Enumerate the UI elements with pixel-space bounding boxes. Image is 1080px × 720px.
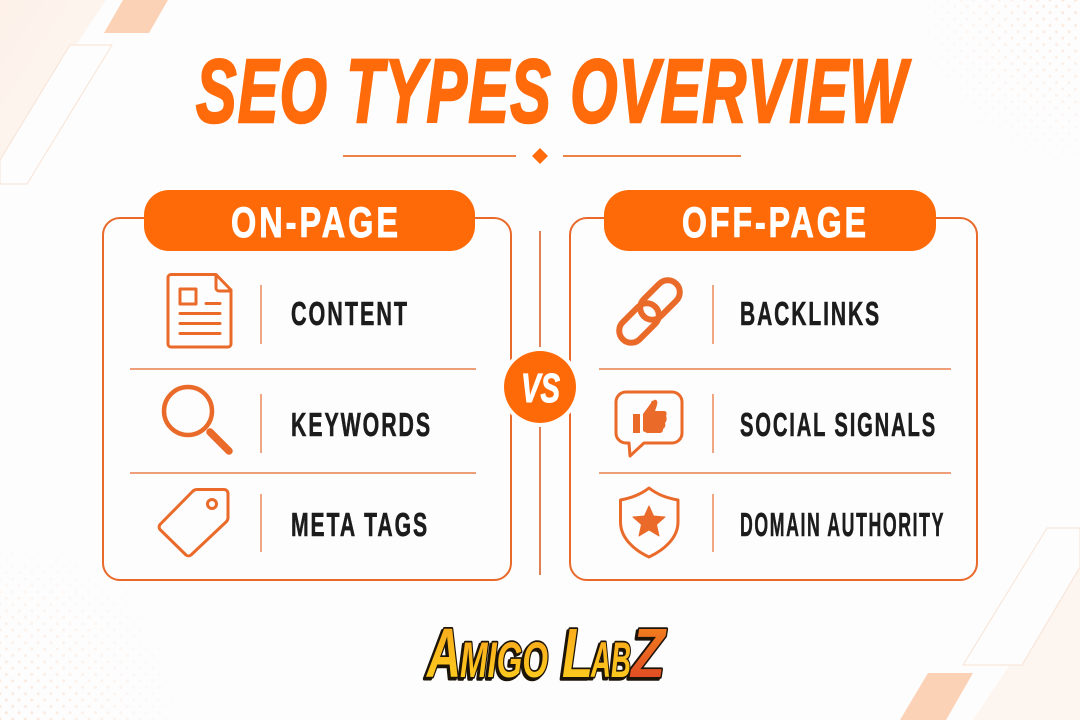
panel outline xyxy=(103,218,511,580)
logo: Amigo LabZ: Z xyxy=(629,614,667,692)
logo: Amigo LabZ: L xyxy=(562,614,593,692)
label: backlinks: BACKLINKS xyxy=(740,295,881,332)
divider stroke: content xyxy=(260,285,262,344)
label: social signals: SOCIAL SIGNALS xyxy=(740,406,937,443)
heading pill: on-page xyxy=(144,190,475,251)
panel outline xyxy=(570,218,977,580)
decoration: top-right halftone dots xyxy=(948,0,1077,128)
icon: document xyxy=(168,274,231,347)
panel: off-page xyxy=(570,190,977,580)
heading pill: on-page: ON-PAGE xyxy=(231,199,401,247)
decoration: bottom-right corner shapes xyxy=(900,528,1080,720)
logo: Amigo LabZ: AB xyxy=(590,632,631,688)
VS badge: VS xyxy=(521,365,560,411)
VS badge xyxy=(500,347,580,427)
logo: Amigo LabZ: MIGO xyxy=(460,632,548,688)
icon: thumbs-up speech bubble xyxy=(616,392,682,456)
icon: shield with star xyxy=(620,488,678,557)
icon: magnifier xyxy=(164,387,229,451)
heading pill: off-page: OFF-PAGE xyxy=(682,199,869,247)
panel: on-page xyxy=(103,190,511,580)
heading pill: off-page xyxy=(604,190,936,251)
logo: Amigo LabZ xyxy=(426,614,667,692)
centre vertical divider xyxy=(539,231,541,575)
decoration: bottom-left halftone dots xyxy=(0,573,146,720)
label: meta tags: META TAGS xyxy=(291,506,429,543)
label: keywords: KEYWORDS xyxy=(291,406,432,443)
logo: Amigo LabZ: A xyxy=(426,614,461,692)
icon: price tag xyxy=(159,489,228,556)
decoration: top-left corner shapes xyxy=(0,0,168,184)
title divider with diamond xyxy=(343,148,741,164)
icon: chain links xyxy=(614,275,685,348)
label: content: CONTENT xyxy=(291,295,409,332)
